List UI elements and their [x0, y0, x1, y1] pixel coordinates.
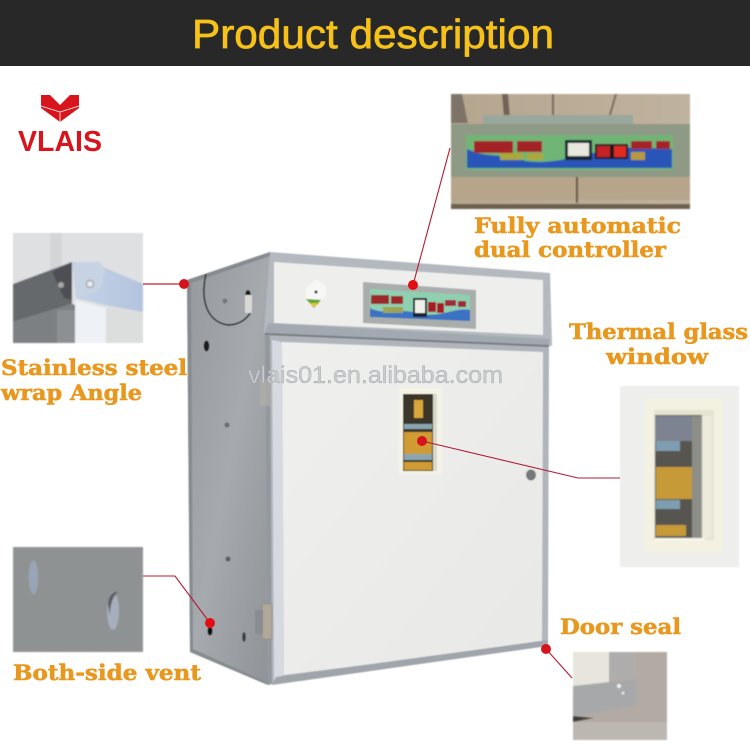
caption: controller: [474, 213, 681, 262]
title: Product description: [192, 11, 554, 57]
callout: door seal: [541, 644, 572, 678]
photo: thermal glass window: [620, 386, 739, 567]
caption: thermal glass: window: [605, 344, 709, 369]
door bottom trim: [272, 640, 548, 685]
side ports: [245, 290, 251, 300]
photo: control panel: [451, 94, 690, 209]
upper front frame: [264, 252, 552, 347]
photo: door seal: [573, 652, 667, 740]
brand name: VLAIS: [18, 126, 102, 158]
vent badge: [306, 279, 326, 308]
power cable: [204, 274, 252, 325]
logo: VLAIS: [18, 95, 102, 158]
caption: controller: Fully automatic: [474, 213, 681, 238]
cabinet side panel: [187, 252, 270, 685]
icon: red winged V: [41, 95, 79, 122]
caption: stainless steel: [0, 355, 187, 405]
hinge: [262, 604, 272, 639]
callout: vent: [143, 576, 215, 628]
callout: wrap angle: [143, 279, 189, 289]
watermark: vlais01.en.alibaba.com: [248, 362, 503, 389]
upper latch: [260, 380, 270, 406]
caption: door seal: Door seal: [560, 614, 681, 639]
caption: controller: dual controller: [474, 237, 667, 262]
photo: side vent: [13, 547, 143, 652]
door knob: [526, 470, 536, 480]
caption: thermal glass: Thermal glass: [569, 319, 748, 344]
caption: vent: Both-side vent: [13, 660, 201, 685]
incubator cabinet: [187, 252, 552, 685]
door frame: [265, 333, 549, 685]
callout: window: [417, 436, 620, 478]
header banner: [0, 0, 750, 66]
caption: stainless steel: Stainless steel: [1, 355, 187, 380]
control panel: [363, 282, 476, 329]
caption: stainless steel: wrap Angle: [0, 380, 142, 405]
callout lines and dots: [143, 148, 620, 678]
inspection window: [399, 388, 442, 474]
photo: stainless wrap angle: [13, 233, 143, 343]
callout: controller: [408, 148, 450, 290]
caption: thermal glass: [569, 319, 748, 369]
door panel: [282, 342, 543, 675]
